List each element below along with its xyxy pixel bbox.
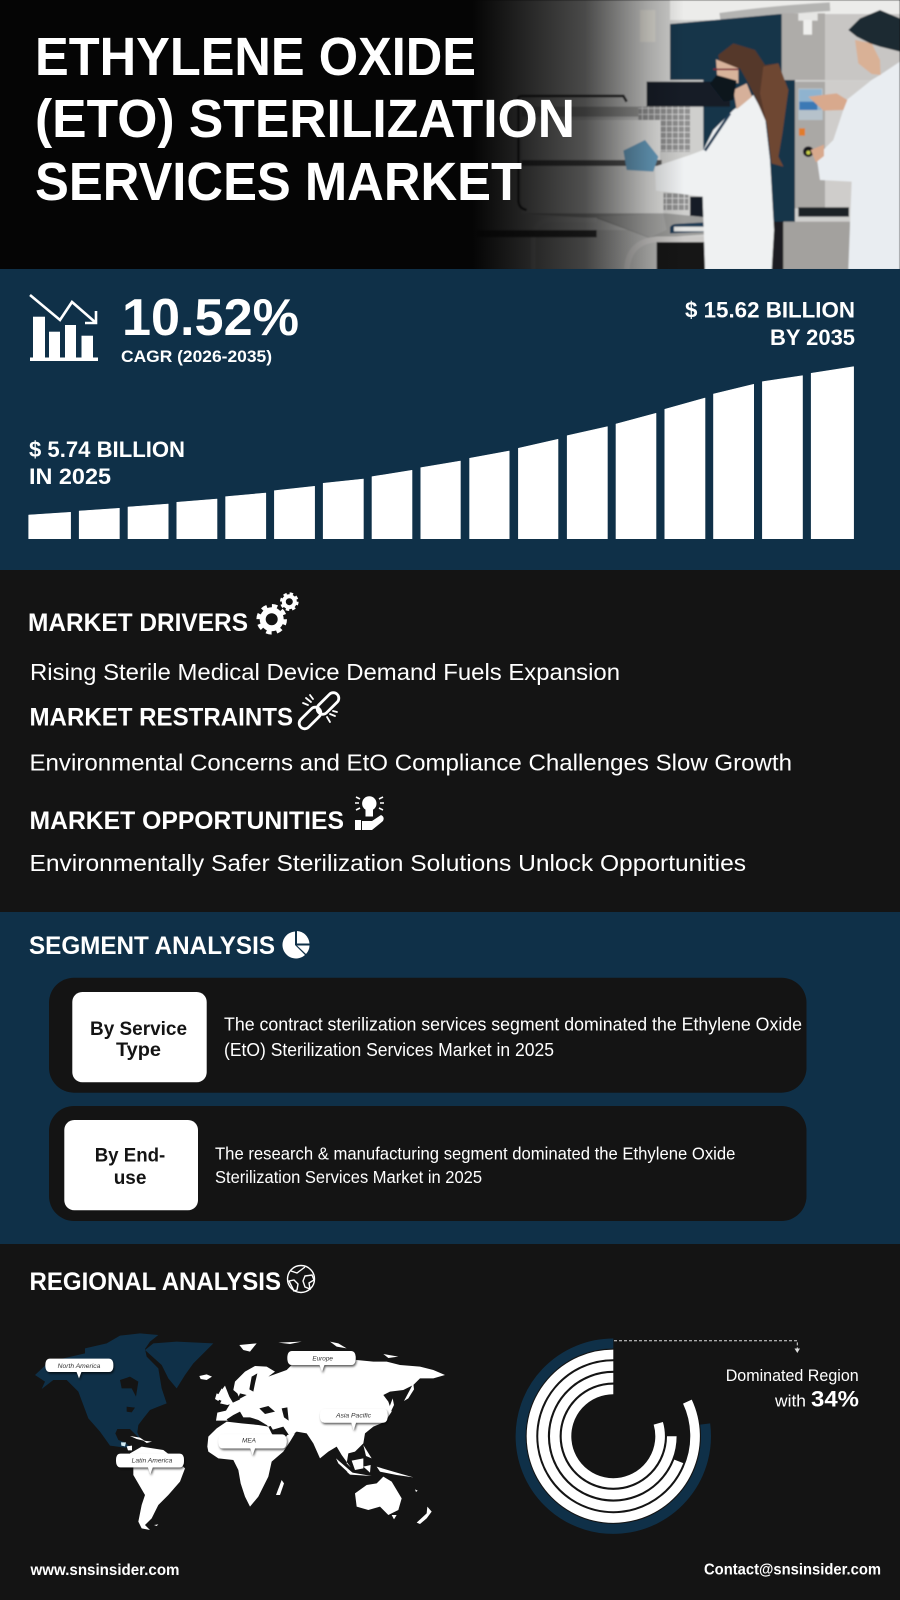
region labels: Europe <box>312 1355 333 1362</box>
region: Caribbean and Latin America <box>121 1374 233 1530</box>
CAGR value: 10.52% <box>122 289 299 347</box>
title: SERVICES MARKET <box>35 152 522 212</box>
woman in white coat <box>655 95 774 270</box>
end value label: BY 2035 <box>770 325 855 350</box>
world map <box>35 1333 445 1530</box>
region: Eurasia, Africa and Oceania <box>207 1342 445 1524</box>
header photo: lab technicians at sterilizer <box>400 0 900 270</box>
heading: market opportunities: MARKET OPPORTUNITIES <box>30 807 344 835</box>
region labels: MEA <box>242 1438 257 1445</box>
wire baskets <box>638 107 690 152</box>
callout: dominated region: 34% <box>811 1387 859 1412</box>
callout: dominated region <box>726 1367 859 1412</box>
region labels: Asia Pacific <box>335 1413 372 1420</box>
machine navy panel <box>670 14 795 223</box>
footer: website: www.snsinsider.com <box>30 1562 179 1579</box>
end value label: $ 15.62 BILLION <box>685 298 855 322</box>
header panel <box>0 0 900 270</box>
text: restraint: Environmental Concerns and EtO Compliance Challenges Slow Growth <box>30 750 792 776</box>
callout: dominated region: Dominated Region <box>726 1367 859 1385</box>
title: ETHYLENE OXIDE <box>35 27 476 87</box>
panel: segment analysis <box>0 912 900 1244</box>
card: by end-use <box>49 1106 806 1221</box>
region: Americas <box>35 1333 233 1530</box>
heading: segment analysis: SEGMENT ANALYSIS <box>29 932 275 960</box>
heading: market restraints: MARKET RESTRAINTS <box>30 704 293 732</box>
start value label <box>29 437 185 489</box>
title: (ETO) STERILIZATION <box>35 89 575 149</box>
heading: regional analysis: REGIONAL ANALYSIS <box>30 1268 281 1296</box>
stainless machine body <box>782 13 825 80</box>
text: opportunity: Environmentally Safer Sterilization Solutions Unlock Opportunities <box>30 850 746 876</box>
panel: market dynamics <box>0 570 900 912</box>
Iceland and British Isles <box>199 1374 212 1380</box>
card: by service type: By Service <box>90 1018 187 1040</box>
arrow: dashed leader to callout <box>614 1341 800 1353</box>
card: by service type: The contract sterilization services segment dominated the Ethylene Oxide <box>224 1015 802 1035</box>
region labels: North America <box>58 1363 101 1370</box>
seas and lakes <box>227 1373 289 1445</box>
region: North America and Greenland (dominant) <box>35 1333 213 1448</box>
region labels <box>58 1355 372 1465</box>
stacked trays <box>522 120 660 160</box>
card: by service type <box>49 978 806 1093</box>
card: by end-use: By End- <box>95 1145 165 1167</box>
callout: dominated region: with <box>774 1393 806 1411</box>
bar chart: market growth <box>29 367 854 539</box>
heading: market drivers: MARKET DRIVERS <box>28 609 248 637</box>
start value label: $ 5.74 BILLION <box>29 437 185 462</box>
card: by service type: Type <box>116 1039 161 1061</box>
CAGR label: CAGR (2026-2035) <box>121 348 272 366</box>
region labels: Latin America <box>132 1458 173 1465</box>
icon: pie chart <box>282 931 310 958</box>
icon: broken chain <box>297 690 341 731</box>
text: driver: Rising Sterile Medical Device Demand Fuels Expansion <box>30 659 620 685</box>
footer: contact email: Contact@snsinsider.com <box>704 1562 881 1578</box>
icon: globe <box>288 1266 314 1292</box>
panel: regional analysis <box>0 1244 900 1600</box>
card: by end-use: The research & manufacturing segment dominated the Ethylene Oxide <box>215 1143 735 1163</box>
start value label: IN 2025 <box>29 464 111 489</box>
man in white coat <box>817 62 900 270</box>
callouts: region labels <box>45 1351 388 1474</box>
panel: market size forecast <box>0 269 900 570</box>
card: by end-use: Sterilization Services Market in 2025 <box>215 1167 482 1187</box>
card: by end-use: use <box>114 1167 147 1189</box>
title <box>35 27 575 212</box>
icon: gears <box>258 594 297 633</box>
end value label <box>685 298 855 350</box>
chart: radial share rings <box>521 1344 706 1529</box>
icon: chart with falling arrow <box>30 295 98 361</box>
icon: hand holding light bulb <box>355 796 384 830</box>
card: by service type: (EtO) Sterilization Services Market in 2025 <box>224 1040 554 1060</box>
